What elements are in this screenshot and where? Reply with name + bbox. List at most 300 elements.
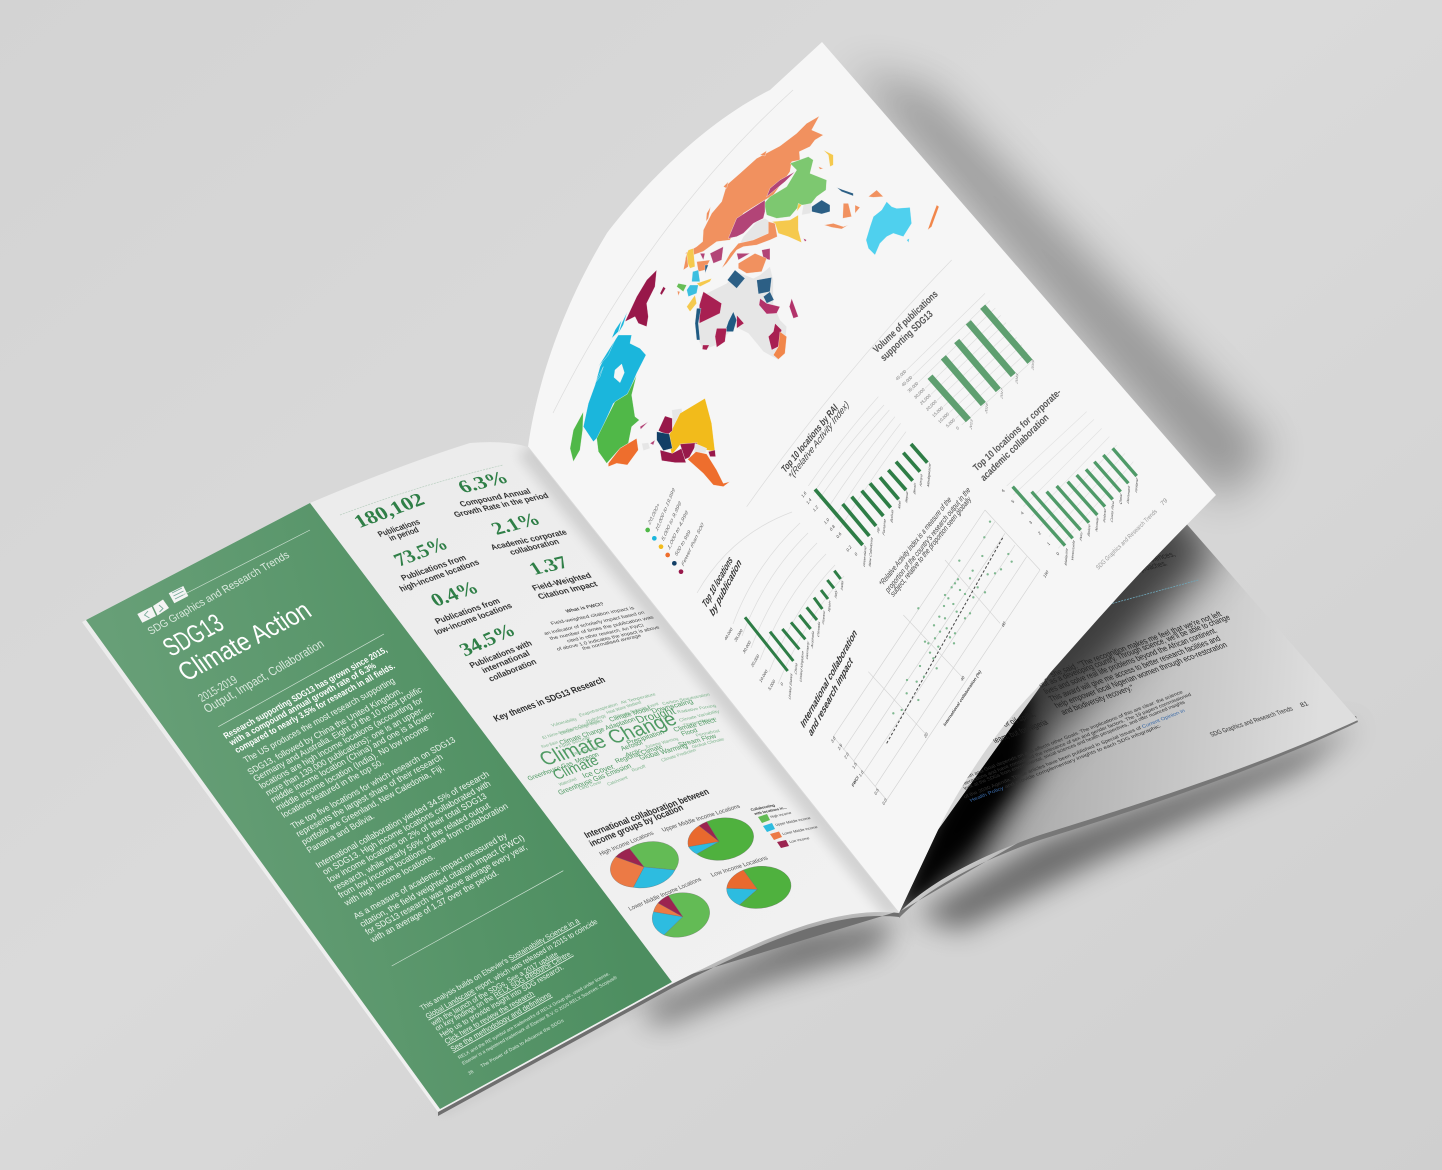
word cloud: Land Cover <box>578 780 603 791</box>
volume chart title: Volume of publications <box>871 289 941 356</box>
publication labels: 35,000 <box>734 627 744 643</box>
chart: corporate-academic collaboration <box>971 387 1139 567</box>
RAI labels: New Caledonia <box>868 535 873 568</box>
map legend <box>645 487 705 574</box>
body paragraph: collaboration: from low income locations came from collaboration <box>336 801 510 900</box>
map: Mexico <box>608 438 638 467</box>
FWCI explainer: the number of times the publication was <box>548 615 656 642</box>
RAI labels: 1.6 <box>800 490 808 499</box>
RAI labels: Fiji <box>876 525 880 535</box>
back page article text: look at the SDGs from environmental, social sciences and health perspectives, and offer nuanced insights <box>963 700 1187 792</box>
key statistics: 34.5% <box>456 619 520 661</box>
volume axis labels: 35,000 <box>907 380 920 394</box>
page rules <box>553 90 952 507</box>
key statistics: Compound Annual <box>457 487 533 508</box>
body paragraph: collaboration: International collaboration yielded 34.5% of research <box>314 769 491 870</box>
body paragraph: collaboration: low income locations on 2% of their total SDG13 <box>325 791 489 884</box>
key statistics: Growth Rate in the period <box>452 491 550 519</box>
word cloud: Climate Model <box>608 706 653 723</box>
publication bars <box>745 571 841 671</box>
word cloud: Downscaling <box>650 699 695 715</box>
word cloud: Radiative Forcing <box>676 703 718 714</box>
word cloud: Climate Change Impact <box>559 718 604 736</box>
pie: upper middle income <box>661 803 754 860</box>
title: SDG13 <box>157 609 229 662</box>
RAI labels: Greenland <box>862 544 867 568</box>
publication labels: Spain <box>827 598 831 613</box>
pie legend: Low Income <box>788 836 810 844</box>
word cloud: Tibetan Plateau <box>682 716 718 728</box>
word cloud: Aerosol <box>620 740 645 752</box>
publication labels: Germany <box>805 638 810 661</box>
key statistics: collaboration <box>486 657 538 683</box>
chart: top 10 by publication <box>697 512 844 701</box>
word cloud: Water Resource <box>573 745 600 756</box>
body paragraph: top five: portfolio are Greenland, New Caledonia, Fiji, <box>299 763 446 847</box>
map legend: 10,000 to 19,999 <box>655 487 676 533</box>
panel notes and links: This analysis builds on Elsevier's Sustainability Science in a <box>418 916 581 1012</box>
scatter axes labels: FWCI <box>851 775 859 788</box>
map: India <box>772 215 802 243</box>
panel notes and links: with the launch of the SDGs. See a 2017 update <box>428 950 560 1028</box>
body paragraph: impact <box>351 831 563 966</box>
scatter points <box>892 520 1013 714</box>
volume chart title: supporting SDG13 <box>879 309 936 364</box>
RAI footnote: *Relative Activity Index is a measure of the <box>878 494 953 588</box>
volume axis labels: 2017 <box>1000 386 1004 400</box>
chart: top 10 by RAI <box>780 397 931 568</box>
body paragraph: top five: represents the largest share of their research <box>294 752 445 839</box>
word cloud: River Basin <box>540 740 559 749</box>
key statistics: Publications from <box>399 553 468 582</box>
pie legend: Lower Middle Income <box>781 825 819 836</box>
key statistics: collaboration <box>507 537 561 557</box>
map legend: 500 to 999 <box>674 529 692 558</box>
back page article text: lives and solve real life problems beyond the African continent. <box>1041 626 1219 696</box>
body paragraph: publications: locations are high income locations (accounting for <box>257 695 425 791</box>
corporate labels: 4 <box>1020 510 1025 516</box>
panel notes and links: The Power of Data to Advance the SDGs <box>479 1018 566 1069</box>
key statistics: low-income locations <box>432 601 514 637</box>
volume axis labels: 2016 <box>984 401 989 415</box>
key statistics: in period <box>387 525 421 543</box>
map: Europe <box>677 247 723 312</box>
pie charts section heading: International collaboration between <box>582 787 712 841</box>
RAI labels: Benin <box>913 480 917 496</box>
corporate bars <box>1013 448 1137 546</box>
corporate labels: 2 <box>1037 530 1042 536</box>
chart: collaboration vs impact scatter <box>799 510 1050 806</box>
body paragraph: impact: for SDG13 research was above average every year, <box>363 842 529 937</box>
scatter title: International collaboration <box>799 627 859 731</box>
RAI labels <box>800 460 931 568</box>
word cloud: Air Temperature <box>619 692 657 705</box>
back page footer: 81 <box>1299 701 1310 709</box>
RAI bars <box>815 444 927 545</box>
RAI title: Top 10 locations by RAI <box>780 402 840 476</box>
word cloud: Climate Variability <box>678 709 721 723</box>
body paragraph: impact: with an average of 1.37 over the period. <box>367 868 501 945</box>
publication labels: Canada <box>816 619 821 639</box>
scatter grid <box>833 510 1040 800</box>
scatter trend line <box>887 537 1003 743</box>
publication labels: 0 <box>780 680 784 687</box>
panel notes and links: Elsevier is a registered trademark of Elsevier B.V. © 2020 RELX Sources: Scopus® <box>460 974 619 1067</box>
RAI labels: 1.0 <box>823 516 830 525</box>
body paragraph: collaboration: on SDG13. High income locations collaborated with <box>320 779 492 877</box>
word cloud: Vulnerability <box>550 716 579 728</box>
map: East and South-East Asia <box>797 150 853 242</box>
pie: lower middle income: Lower Middle Income Locations <box>627 876 703 912</box>
running header: SDG Graphics and Research Trends <box>145 549 292 637</box>
map: Arctic islands <box>595 312 627 383</box>
publication labels <box>724 578 844 701</box>
flying right page <box>528 42 1216 913</box>
title <box>157 596 317 687</box>
publication labels: 30,000 <box>742 639 752 655</box>
lead paragraph: with a compound annual growth rate of 6.3% <box>226 661 378 748</box>
map: USA and Alaska <box>570 375 639 463</box>
scatter axes labels: 1.5 <box>852 760 858 770</box>
body paragraph: publications: SDG13, followed by China the United Kingdom, <box>245 686 404 777</box>
RAI labels: 0.2 <box>845 544 853 553</box>
scatter axes labels: 150 <box>1043 568 1050 579</box>
map legend: 5,000 to 9,999 <box>661 500 683 543</box>
publication labels: Italy <box>834 587 838 600</box>
back page article text: of oil spills, <box>1000 709 1037 729</box>
word cloud: Carbon Sequestration <box>661 692 711 706</box>
RAI labels: 0.8 <box>829 523 836 532</box>
corporate labels: Venezuela <box>1071 538 1075 562</box>
FWCI explainer <box>543 602 661 652</box>
body paragraph: impact: As a measure of academic impact measured by <box>351 831 509 921</box>
key statistics: 0.4% <box>427 577 483 611</box>
body paragraph: top five: Panama and Bolivia. <box>305 811 376 855</box>
body paragraph: publications <box>241 676 437 820</box>
word cloud: Global Climate <box>690 737 726 749</box>
volume axis labels: 25,000 <box>919 393 932 406</box>
corporate labels: 3 <box>1028 519 1033 525</box>
scatter axes labels: 1.0 <box>858 768 865 778</box>
key statistics: Publications with <box>467 638 534 670</box>
pie legend: High Income <box>769 811 792 819</box>
corporate labels: Belize <box>1087 522 1091 538</box>
publication chart title: by publication <box>708 557 744 619</box>
chart: volume of publications <box>871 289 1035 431</box>
volume axis labels <box>895 357 1035 431</box>
word cloud: Heat Wave Wetland <box>605 700 643 715</box>
panel notes and links: Click here to review the research <box>443 989 536 1046</box>
key statistics: Academic corporate <box>488 527 569 552</box>
scatter axes labels: 20 <box>923 731 929 739</box>
panel notes and links <box>418 916 619 1077</box>
map: Australia and Oceania <box>824 190 939 255</box>
corporate labels: 0 <box>1055 551 1061 556</box>
back right page <box>899 505 1358 913</box>
key statistics: 1.37 <box>525 553 573 579</box>
scatter axes labels: 2.0 <box>844 750 850 760</box>
body paragraph: collaboration: research, while nearly 56% of the related output <box>331 800 492 892</box>
pie: high income: High Income Locations <box>598 830 655 857</box>
corporate labels: Ireland <box>1102 506 1107 524</box>
back page article text <box>958 549 1232 804</box>
map: South America <box>657 398 730 487</box>
publication labels: China <box>794 660 798 676</box>
publication labels: Australia <box>810 628 815 650</box>
pie legend <box>750 803 819 848</box>
map: Middle East <box>722 222 777 273</box>
word cloud: Climate Change Adaptation <box>558 716 637 747</box>
body paragraph: collaboration: with high income locations. <box>341 852 437 908</box>
corporate labels: 5 <box>1010 498 1016 504</box>
corporate labels: Costa Rica <box>1110 498 1115 524</box>
body paragraph: publications: Germany and Australia. Eight of the 10 most prolific <box>251 685 424 783</box>
corporate chart title: Top 10 locations for corporate- <box>971 387 1064 474</box>
volume axis labels: 2018 <box>1015 371 1019 385</box>
volume axis labels: 45,000 <box>895 368 908 382</box>
RAI labels: Mali <box>898 499 901 510</box>
corporate labels: 1 <box>1046 541 1051 546</box>
word cloud: Extreme Warming <box>644 736 679 749</box>
scatter title: and research impact <box>807 655 855 739</box>
body paragraph: publications: more than 139,000 publications); one is an upper- <box>263 705 426 798</box>
key statistics: Field-Weighted <box>530 571 593 592</box>
corporate labels: Malaysia <box>1064 546 1068 567</box>
key statistics: Publications from <box>433 596 502 626</box>
publication labels: 5,000 <box>768 678 776 692</box>
scatter axes labels: 0.5 <box>874 786 880 796</box>
map: Russia <box>685 116 823 255</box>
lead paragraph: Research supporting SDG13 has grown since 2015, <box>221 645 389 741</box>
pie: upper middle income: Upper Middle Income Locations <box>661 803 742 833</box>
panel notes and links: See the methodology and definitions <box>449 990 553 1053</box>
green panel <box>86 503 672 1109</box>
floor shadows <box>440 70 1358 1112</box>
back page article text: out as a developing country. Through science, we'll be able to change <box>1036 612 1232 689</box>
publication labels: 20,000 <box>750 652 760 668</box>
pie: low income: Low Income Locations <box>710 855 769 878</box>
publication chart title: Top 10 locations <box>701 554 735 611</box>
subtitle: Output, Impact, Collaboration <box>201 637 327 716</box>
FWCI explainer: cited in other research. An FWCI <box>566 623 645 644</box>
map: Africa <box>695 267 798 360</box>
key statistics: Publications <box>376 517 422 539</box>
word cloud: Regional Climate <box>614 744 664 765</box>
corporate labels: Denmark <box>1126 483 1131 505</box>
subtitle <box>195 634 384 727</box>
word cloud: Climate Effect <box>672 718 718 733</box>
word cloud: Greenhouse Gas <box>527 760 575 782</box>
body paragraph: publications: middle income location (China) and one is a lower- <box>268 709 437 805</box>
corporate labels <box>1001 476 1139 567</box>
word cloud: Food Security <box>558 735 592 749</box>
pie legend: Collaborating <box>750 803 776 812</box>
key statistics: international <box>480 648 532 675</box>
body paragraph: publications: The US produces the most research supporting <box>241 676 397 765</box>
pie: low income <box>710 855 791 908</box>
volume axis labels: 5,000 <box>945 417 956 429</box>
subtitle: 2015-2019 <box>195 673 240 705</box>
map: Canada <box>583 335 646 442</box>
panel notes and links: RELX and the RE symbol are trademarks of RELX Group plc, used under license. <box>457 971 611 1061</box>
left page <box>82 442 899 1112</box>
word cloud: Flood <box>680 727 699 738</box>
back page stack edge <box>899 716 1358 918</box>
volume axis labels: 15,000 <box>931 405 944 418</box>
lead paragraph: compared to nearly 3.5% for research in all fields. <box>233 661 397 755</box>
map legend: 1,000 to 4,999 <box>667 509 690 552</box>
pie legend: Upper Middle Income <box>774 816 812 827</box>
body paragraph: publications: middle income location (India). No low income <box>273 723 431 813</box>
key statistics <box>350 468 599 683</box>
word cloud: Climate Prediction <box>660 747 697 763</box>
back page article text: approaches. <box>1130 559 1169 575</box>
panel notes and links: Help us to provide insight into SDG research. <box>438 963 566 1039</box>
map: Siberian coast islands <box>706 151 767 222</box>
key statistics: 180,102 <box>350 489 429 532</box>
key statistics: 73.5% <box>390 533 452 571</box>
RAI labels: Madagascar <box>926 460 931 489</box>
RAI labels: 1.4 <box>805 496 813 505</box>
world map <box>570 116 939 487</box>
RAI labels: Bolivia <box>890 507 894 524</box>
body paragraph: impact: citation, the field weighted citation impact (FWCI) <box>358 833 526 929</box>
word cloud: Greenhouse Gas Emission <box>556 761 633 797</box>
word cloud: Drought <box>633 706 678 726</box>
back page article text: health and Goal depends on and affects other Goals. The implications of this are clear: the science <box>958 690 1185 783</box>
left page stack edge <box>438 911 899 1116</box>
volume axis labels: 40,000 <box>901 374 914 388</box>
RAI labels: 0 <box>854 551 859 557</box>
top rule on white column <box>340 465 503 515</box>
word cloud: El Nino-Southern Oscillation <box>541 718 601 740</box>
word cloud: Climate Extreme Event <box>614 701 660 719</box>
publication labels: India <box>840 578 844 592</box>
word cloud: Catchment <box>606 775 629 787</box>
FWCI explainer: What is FWCI? <box>564 602 605 614</box>
panel notes and links: 38 <box>467 1069 475 1077</box>
word cloud: Hydrology <box>585 713 607 724</box>
scatter axes labels: International collaboration (%) <box>943 668 982 727</box>
panel notes and links: on key findings on the RELX SDG Resource Centre. <box>433 949 574 1033</box>
back page footer: SDG Graphics and Research Trends <box>1209 706 1295 738</box>
RAI labels: Kenya <box>919 471 923 488</box>
publication labels: United Kingdom <box>799 649 804 684</box>
back page article text: and biodiversity recovery." <box>1059 683 1136 717</box>
corporate chart title: academic collaboration <box>979 412 1051 484</box>
volume axis labels: 30,000 <box>913 387 926 400</box>
scatter axes labels: 80 <box>1001 620 1007 628</box>
word cloud: Permafrost <box>694 728 722 738</box>
gutter shading <box>528 447 899 913</box>
spine line <box>528 447 899 913</box>
scatter axes labels: 2.5 <box>837 742 843 751</box>
FWCI explainer: an indicator of scholarly impact based on <box>543 610 646 637</box>
FWCI explainer: the normalised average <box>581 633 643 652</box>
back page article text: ell," she said. "The recognition makes me feel that we're not left <box>1035 609 1224 683</box>
key themes heading: Key themes in SDG13 Research <box>492 675 608 724</box>
corporate labels: Qatar <box>1119 491 1123 506</box>
word cloud: Watershed <box>558 776 578 787</box>
publication labels: United States <box>788 671 793 701</box>
map legend: Fewer than 500 <box>681 521 705 568</box>
key statistics: 2.1% <box>487 509 544 539</box>
body paragraph: top five: The top five locations for which research on SDG13 <box>289 735 457 831</box>
map legend: 20,000+ <box>647 502 661 528</box>
publication labels: France <box>821 608 826 626</box>
word cloud: Evapotranspiration <box>578 702 619 718</box>
RAI footnote: proportion of the country's research output in the <box>884 485 972 595</box>
corporate labels: Peru <box>1079 529 1083 543</box>
volume axis labels: 20,000 <box>925 399 938 412</box>
title: Climate Action <box>172 596 317 687</box>
back page article text: help empower local Nigerian women through eco-restoration <box>1052 640 1229 710</box>
word cloud: Stream Flow <box>677 733 719 748</box>
map: Mongolia and Kazakhstan <box>728 172 795 260</box>
map: central Asia <box>740 218 770 243</box>
volume axis labels: 10,000 <box>937 411 950 424</box>
panel navigation icons <box>137 586 188 623</box>
corporate labels: 6 <box>1001 488 1006 493</box>
volume axis labels: 2015 <box>969 417 973 431</box>
pie: high income <box>598 830 679 888</box>
FWCI explainer: of above 1.0 indicates the impact is above <box>555 625 661 652</box>
volume axis labels: 0 <box>955 425 960 431</box>
RAI labels: Nepal <box>905 489 909 504</box>
RAI labels: Panama <box>882 516 886 537</box>
FWCI explainer: Field-weighted citation impact is <box>549 605 636 627</box>
key statistics: 6.3% <box>454 468 513 497</box>
key statistics: Citation Impact <box>536 579 599 601</box>
word cloud: Climate <box>550 753 602 783</box>
back page article text: Health Policy and provide complementary insights to each SDG infographic. <box>969 724 1163 804</box>
word cloud: Runoff <box>630 764 647 773</box>
back page article text: team, but for Nigeria <box>990 717 1050 745</box>
back page divider <box>1107 580 1198 605</box>
pie charts section heading: income groups by location <box>587 803 686 849</box>
scatter axes labels: 3.0 <box>830 734 837 744</box>
map: Greenland and Iceland <box>625 270 666 327</box>
back page article text: Sciences, <box>1142 549 1177 565</box>
RAI footnote: subject, relative to the proportion seen globally <box>889 494 973 599</box>
volume axis labels: 2019 <box>1031 357 1035 371</box>
RAI labels: 0.6 <box>835 530 843 539</box>
corporate labels: Finland <box>1134 476 1139 494</box>
word cloud <box>527 692 726 797</box>
right page footer: 79 <box>1159 497 1169 508</box>
body paragraph: publications: locations featured in the top 50. <box>279 757 385 820</box>
map: China <box>764 157 827 218</box>
word cloud: Precipitation <box>626 729 666 747</box>
right page footer: SDG Graphics and Research Trends <box>1095 508 1159 572</box>
key statistics: high-income locations <box>397 557 481 593</box>
back page article text: interactions and have considered the relevance of sex and gender factors. The 19 papers commissioned <box>960 692 1193 788</box>
word cloud: Global Warming <box>637 741 689 762</box>
map: Central America <box>640 422 655 451</box>
publication labels: 40,000 <box>724 626 734 642</box>
publication labels: 10,000 <box>759 668 769 684</box>
pie legend: with locations in... <box>752 806 787 816</box>
back page article text: This award will give me access to better research facilities and <box>1046 634 1222 703</box>
word cloud: Ice Cover <box>580 762 616 780</box>
pie: lower middle income <box>627 876 710 937</box>
RAI labels: 1.2 <box>812 504 819 513</box>
word cloud: Arctic <box>624 748 643 758</box>
corporate labels: Norway <box>1095 514 1099 533</box>
panel notes and links: Global Landscape report, which was released in 2015 to coincide <box>424 917 599 1021</box>
scatter axes labels: 0.0 <box>882 796 888 806</box>
RAI title: *(Relative Activity Index) <box>787 399 851 482</box>
